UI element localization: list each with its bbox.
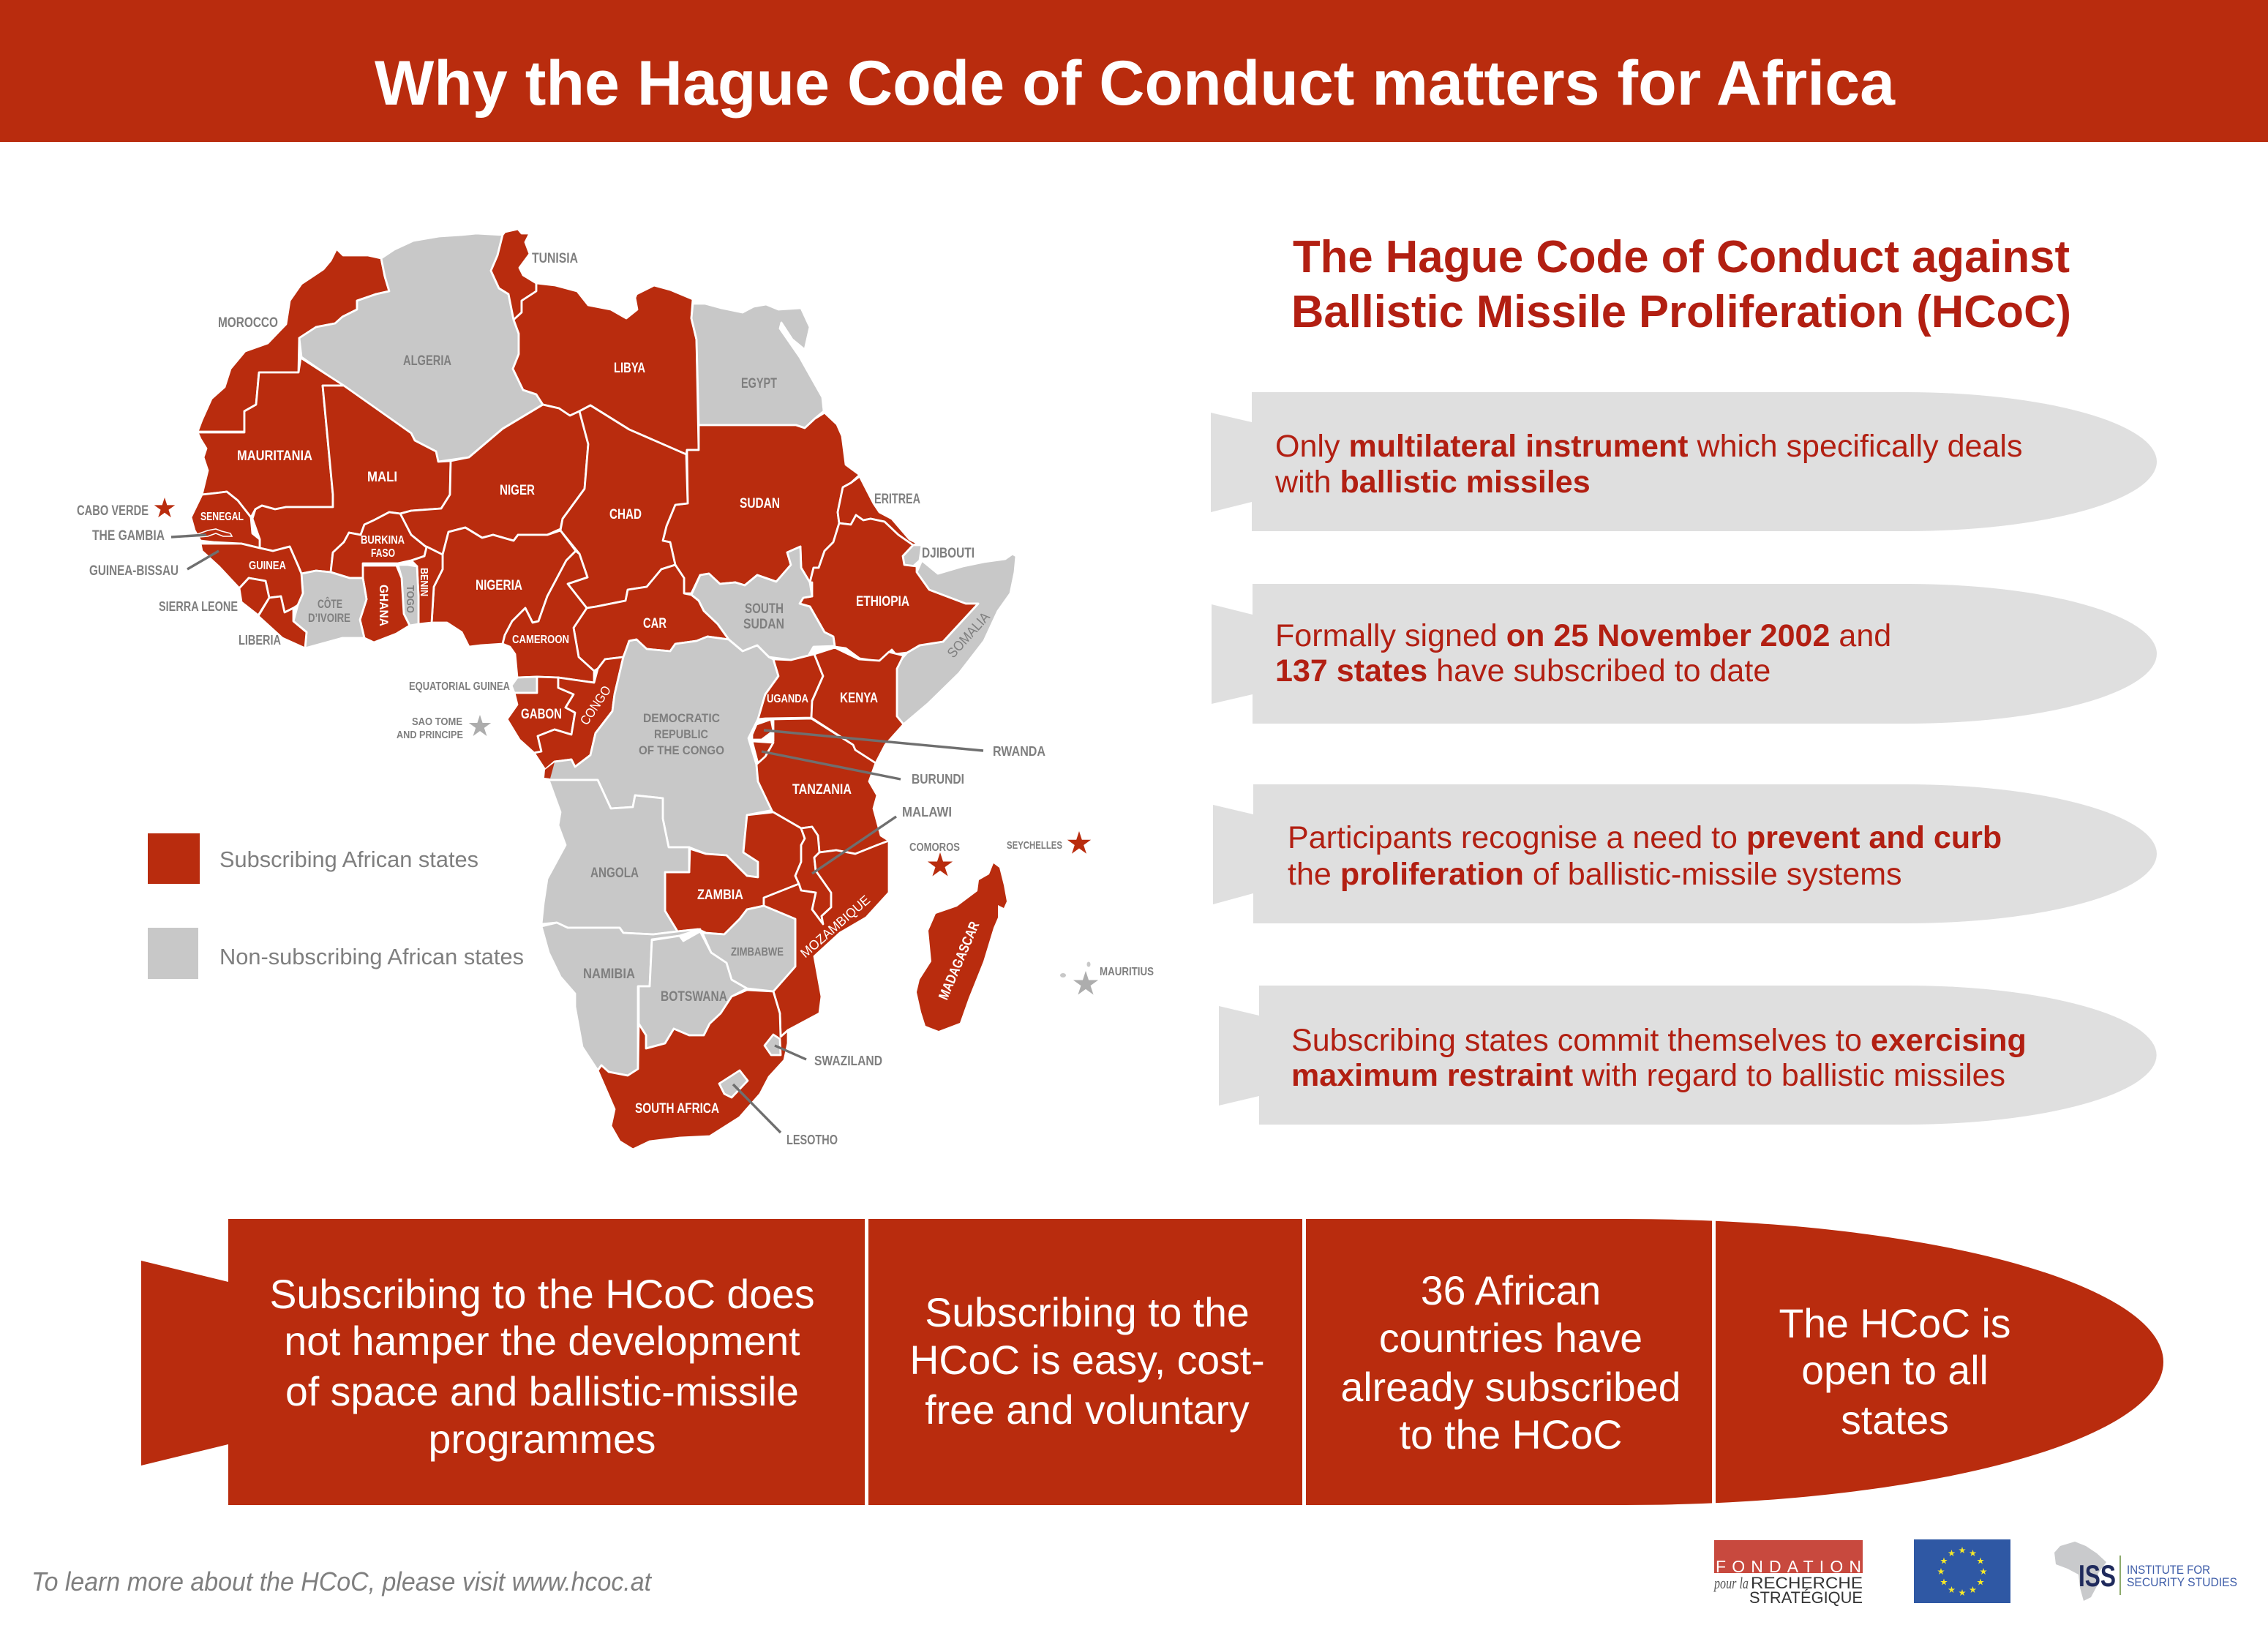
map labels: SIERRA LEONE <box>159 599 238 614</box>
legend label: subscribing: Subscribing African states <box>219 847 478 872</box>
country: South Africa <box>598 990 788 1149</box>
missile panel: restraint: maximum restraint with regard to ballistic missiles <box>1291 1058 2005 1093</box>
map labels: SWAZILAND <box>814 1054 882 1068</box>
bottom panel text 1: not hamper the development <box>284 1318 800 1364</box>
bottom panel text 1 <box>269 1272 815 1462</box>
country: Mauritania <box>198 358 344 517</box>
country: Tanzania <box>756 718 889 854</box>
country: Ghana <box>360 566 410 642</box>
country: Swaziland <box>765 1035 781 1055</box>
country: Botswana <box>639 931 747 1048</box>
missile panel: signed date: 137 states have subscribed to date <box>1275 653 1771 688</box>
map labels: BURUNDI <box>912 772 964 787</box>
missile panel: participants: Participants recognise a need to prevent and curb <box>1288 820 2002 855</box>
country: Chad <box>560 405 688 608</box>
map labels: SENEGAL <box>200 511 244 523</box>
star: Sao Tome and Principe <box>469 715 491 736</box>
map labels: MOZAMBIQUE <box>797 893 873 961</box>
map labels: SEYCHELLES <box>1007 839 1062 852</box>
country: Egypt <box>691 304 824 428</box>
country: Morocco and Western Sahara <box>198 249 389 432</box>
country: Nigeria <box>432 528 576 647</box>
country: Guinea and Guinea-Bissau <box>200 544 303 612</box>
map labels: TOGO <box>404 585 416 613</box>
map labels: SOUTH AFRICA <box>635 1101 719 1117</box>
bottom panel text 3: to the HCoC <box>1400 1412 1622 1457</box>
map labels: GHANA <box>377 585 391 626</box>
star: Cabo Verde <box>154 498 175 517</box>
country: Somalia <box>897 554 1016 724</box>
map labels: BENIN <box>418 568 430 596</box>
country: Mozambique <box>764 841 889 1037</box>
map labels: EGYPT <box>741 376 777 391</box>
bottom panel text 4 <box>1779 1301 2011 1443</box>
map labels: GUINEA-BISSAU <box>89 563 179 579</box>
logo: Fondation pour la Recherche Strategique: FONDATION <box>1716 1557 1861 1576</box>
map labels: ANGOLA <box>590 866 639 881</box>
bottom panel text 4: open to all <box>1801 1348 1989 1393</box>
map labels: TUNISIA <box>532 251 578 266</box>
map labels: ALGERIA <box>403 353 451 369</box>
map labels: MAURITANIA <box>237 449 312 464</box>
country: Niger <box>400 405 588 555</box>
bottom panel text 1: programmes <box>429 1417 656 1462</box>
map labels: SOMALIA <box>945 609 994 661</box>
map labels: GUINEA <box>249 560 286 572</box>
legend label: non-subscribing: Non-subscribing African states <box>219 944 524 969</box>
map labels: LIBERIA <box>239 633 281 648</box>
map labels: DJIBOUTI <box>922 546 975 561</box>
map labels: LIBYA <box>614 361 645 376</box>
missile panel: restraint <box>1219 986 2157 1125</box>
map labels: ZAMBIA <box>697 888 743 903</box>
missile panel: multilateral instrument <box>1211 392 2157 531</box>
star: Comoros <box>928 852 953 877</box>
bottom panel text 1: of space and ballistic-missile <box>285 1369 799 1414</box>
country: Madagascar <box>917 863 1007 1031</box>
map labels: D’IVOIRE <box>308 611 350 625</box>
country: Mali <box>252 386 451 574</box>
logo: Fondation pour la Recherche Strategique <box>1713 1540 1863 1607</box>
country: Togo <box>398 565 418 626</box>
country: South Sudan <box>691 547 835 660</box>
header banner <box>0 0 2268 142</box>
map labels: UGANDA <box>767 693 808 705</box>
legend swatch: non-subscribing <box>148 928 198 979</box>
country: Congo <box>534 657 623 770</box>
logo: European Union flag <box>1914 1539 2010 1603</box>
missile panel: multilateral instrument: Only multilateral instrument which specifically deals <box>1275 429 2023 464</box>
bottom panel text 4: The HCoC is <box>1779 1301 2011 1346</box>
map labels: ETHIOPIA <box>856 594 909 609</box>
legend <box>148 833 524 979</box>
map labels: CÔTE <box>318 597 342 611</box>
country: Djibouti <box>903 545 922 566</box>
country: Sudan <box>663 413 860 593</box>
star: Mauritius <box>1060 961 1098 995</box>
map labels: FASO <box>371 547 395 560</box>
map labels: NAMIBIA <box>583 967 635 982</box>
bottom panel text 3: 36 African <box>1421 1268 1601 1313</box>
map of Africa <box>77 229 1154 1149</box>
country: Zimbabwe <box>702 906 795 991</box>
bottom panel text 2: Subscribing to the <box>925 1290 1250 1335</box>
bottom panel text 2 <box>909 1290 1265 1433</box>
map labels: SAO TOME <box>412 716 462 728</box>
logo: Fondation pour la Recherche Strategique: pour la <box>1713 1574 1749 1592</box>
leader lines <box>171 535 983 1133</box>
map labels: NIGERIA <box>476 578 522 593</box>
country: Ethiopia <box>800 515 978 661</box>
missile panel: participants: the proliferation of ballistic-missile systems <box>1288 857 1902 892</box>
country: Uganda <box>758 654 823 719</box>
country: Algeria <box>299 233 543 462</box>
divider strokes <box>865 1215 1716 1509</box>
map labels: REPUBLIC <box>654 727 708 741</box>
missile panel: restraint: Subscribing states commit themselves to exercising <box>1291 1023 2027 1058</box>
country: Liberia <box>258 596 307 648</box>
map labels: MALAWI <box>902 805 952 819</box>
map labels: COMOROS <box>909 841 960 854</box>
missile panel: signed date: Formally signed on 25 November 2002 and <box>1275 618 1891 653</box>
map labels: BOTSWANA <box>661 989 727 1005</box>
country: Senegal <box>191 492 260 548</box>
map labels: CAMEROON <box>512 634 569 646</box>
country: Lesotho <box>719 1070 748 1097</box>
map labels: KENYA <box>840 691 878 706</box>
missile panel: participants <box>1213 784 2157 923</box>
map labels <box>77 251 1154 1147</box>
map labels: EQUATORIAL GUINEA <box>409 680 510 693</box>
logo: Fondation pour la Recherche Strategique: RECHERCHE <box>1751 1574 1863 1592</box>
map labels: ERITREA <box>874 492 920 507</box>
country: Angola <box>541 780 689 934</box>
title: Why the Hague Code of Conduct matters for Africa <box>375 48 1896 119</box>
bottom panel text 3 <box>1341 1268 1681 1457</box>
country: Kenya <box>811 648 904 763</box>
bottom panel text 3: countries have <box>1379 1316 1642 1361</box>
country: Cabinda exclave <box>544 762 555 778</box>
map labels: MALI <box>367 470 397 485</box>
country: Malawi <box>795 827 831 924</box>
country: Burundi <box>752 741 773 763</box>
footer link text: To learn more about the HCoC, please visit www.hcoc.at <box>31 1566 653 1596</box>
country: Benin <box>411 547 443 624</box>
missile panel: multilateral instrument: with ballistic missiles <box>1274 465 1591 500</box>
legend swatch: subscribing <box>148 833 200 884</box>
map labels: GABON <box>521 707 562 722</box>
map labels: BURKINA <box>361 534 405 547</box>
map labels: CONGO <box>577 683 614 727</box>
map labels: SUDAN <box>740 496 780 511</box>
section heading <box>1291 232 2071 337</box>
map labels: CAR <box>643 616 666 631</box>
bottom missile <box>141 1215 2163 1509</box>
map labels: NIGER <box>500 483 535 498</box>
bottom panel text 2: free and voluntary <box>925 1387 1250 1433</box>
map labels: MAURITIUS <box>1100 966 1154 978</box>
section heading: Ballistic Missile Proliferation (HCoC) <box>1291 287 2071 337</box>
country: Equatorial Guinea <box>511 677 537 693</box>
country: Libya <box>513 283 699 454</box>
country: Zambia <box>665 812 805 934</box>
country: Cameroon <box>503 551 594 683</box>
country: Eritrea <box>838 476 918 545</box>
map labels: CHAD <box>609 507 642 522</box>
logo: Institute for Security Studies: ISS <box>2079 1558 2116 1593</box>
country: Rwanda <box>752 719 773 740</box>
logo: Fondation pour la Recherche Strategique: STRATÉGIQUE <box>1749 1588 1863 1607</box>
bottom panel text 1: Subscribing to the HCoC does <box>269 1272 815 1317</box>
logo: Institute for Security Studies: SECURITY STUDIES <box>2127 1575 2237 1589</box>
map labels: OF THE CONGO <box>639 743 724 757</box>
bottom panel text 4: states <box>1841 1397 1949 1443</box>
country: Gabon <box>507 677 575 753</box>
map labels: MADAGASCAR <box>936 919 983 1002</box>
country: Burkina Faso <box>331 512 427 578</box>
map labels: CABO VERDE <box>77 503 149 519</box>
map labels: MOROCCO <box>218 315 278 331</box>
logo: Institute for Security Studies: INSTITUTE FOR <box>2127 1563 2210 1577</box>
country: Central African Republic <box>574 565 729 671</box>
missile panel: signed date <box>1212 584 2157 724</box>
map labels: AND PRINCIPE <box>397 729 463 741</box>
logo: Institute for Security Studies <box>2054 1542 2237 1601</box>
map labels: LESOTHO <box>786 1133 838 1147</box>
bottom panel text 2: HCoC is easy, cost- <box>909 1337 1265 1383</box>
country: Sierra Leone <box>239 578 269 615</box>
map labels: SUDAN <box>743 617 784 632</box>
map labels: RWANDA <box>993 744 1045 759</box>
country: Democratic Republic of the Congo <box>549 637 778 877</box>
map labels: ZIMBABWE <box>731 946 784 958</box>
country: Namibia <box>541 923 700 1076</box>
map labels: TANZANIA <box>792 782 852 798</box>
country: Cote d'Ivoire <box>293 571 367 648</box>
map labels: SOUTH <box>745 601 784 617</box>
country: The Gambia <box>198 529 232 537</box>
map labels: THE GAMBIA <box>92 528 165 544</box>
section heading: The Hague Code of Conduct against <box>1293 232 2070 282</box>
map labels: DEMOCRATIC <box>643 711 720 725</box>
star: Seychelles <box>1067 831 1091 854</box>
country: Tunisia <box>491 229 536 320</box>
bottom panel text 3: already subscribed <box>1341 1365 1681 1410</box>
